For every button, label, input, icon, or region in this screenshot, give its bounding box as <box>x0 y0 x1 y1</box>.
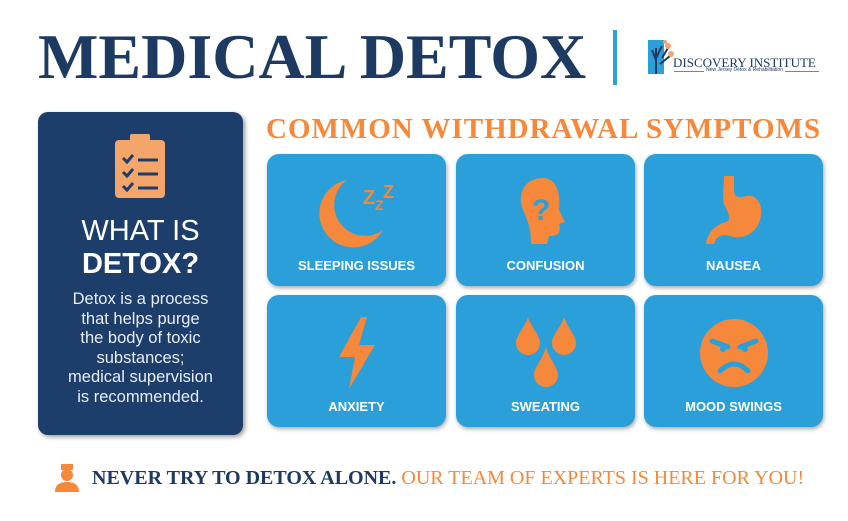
text block: is recommended. <box>77 388 204 406</box>
icon: doctor <box>55 464 79 492</box>
text block: that helps purge <box>81 310 200 328</box>
card: confusion: ? <box>532 194 550 227</box>
text block: the body of toxic <box>80 329 201 347</box>
card: sleeping issues <box>267 154 446 286</box>
card: sleeping issues: Z <box>382 182 394 202</box>
heading: DETOX? <box>82 248 199 280</box>
card: sweating: SWEATING <box>511 399 580 414</box>
logo: DISCOVERY INSTITUTE <box>673 55 816 70</box>
callout: footer message: NEVER TRY TO DETOX ALONE. OUR TEAM OF EXPERTS IS HERE FOR YOU! <box>92 467 804 489</box>
heading <box>81 215 200 280</box>
card: nausea <box>644 154 823 286</box>
card: sleeping issues: Z <box>374 197 384 213</box>
card: anxiety: ANXIETY <box>328 399 385 414</box>
text block: Detox is a process <box>73 290 208 308</box>
heading: common withdrawal symptoms: COMMON WITHDRAWAL SYMPTOMS <box>266 113 821 145</box>
text block: medical supervision <box>68 368 213 386</box>
title: MEDICAL DETOX <box>38 21 586 92</box>
card: confusion: CONFUSION <box>506 258 584 273</box>
card: sweating <box>456 295 635 427</box>
card: sleeping issues: Z <box>362 187 375 209</box>
panel: what is detox <box>38 112 243 435</box>
logo: New Jersey Detox & Rehabilitation <box>706 67 783 73</box>
card: mood swings <box>644 295 823 427</box>
text block <box>68 290 213 406</box>
card: anxiety <box>267 295 446 427</box>
icon: clipboard <box>115 134 165 198</box>
card: confusion <box>456 154 635 286</box>
text block: substances; <box>96 348 185 366</box>
card: sleeping issues: SLEEPING ISSUES <box>298 258 415 273</box>
card: mood swings: MOOD SWINGS <box>685 399 782 414</box>
logo <box>648 40 819 74</box>
divider line <box>613 30 617 85</box>
card: nausea: NAUSEA <box>706 258 761 273</box>
heading: WHAT IS <box>81 215 200 247</box>
